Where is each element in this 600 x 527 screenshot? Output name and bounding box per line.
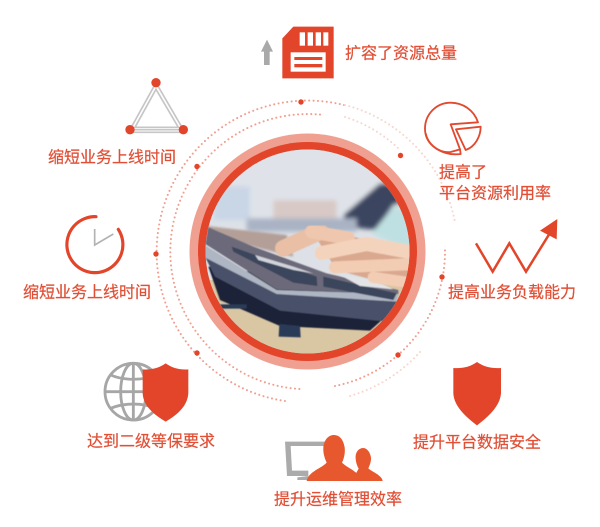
icon: shield <box>453 362 501 425</box>
orbit dots <box>153 99 445 358</box>
label: improve utilization: 平台资源利用率 <box>439 184 551 202</box>
photo: desk <box>210 280 406 354</box>
photo: hands <box>283 232 413 290</box>
dotted orbit rings <box>157 101 455 401</box>
label: improve utilization: 提高了 <box>439 164 487 182</box>
label: improve data security: 提升平台数据安全 <box>413 434 541 452</box>
icon: pie chart <box>425 103 481 154</box>
label: expand resources: 扩容了资源总量 <box>345 44 457 62</box>
icon: globe and shield <box>105 363 188 422</box>
icon: monitor and people <box>285 435 383 481</box>
central photo circle <box>190 134 426 370</box>
icon: rising trend arrow <box>476 219 557 272</box>
label: meet level two protection: 达到二级等保要求 <box>87 432 215 450</box>
label: shorten launch time, upper: 缩短业务上线时间 <box>48 148 176 166</box>
icon: capacity arrow and floppy disk <box>261 27 334 78</box>
label: improve operations efficiency: 提升运维管理效率 <box>274 490 402 508</box>
icon: triangle network <box>125 78 188 134</box>
icon: clock <box>67 217 123 273</box>
photo: keyboard <box>205 227 398 337</box>
label: improve utilization <box>439 164 551 202</box>
photo: blurred background <box>210 150 410 246</box>
label: shorten launch time, lower: 缩短业务上线时间 <box>23 284 151 302</box>
label: improve load capacity: 提高业务负载能力 <box>448 284 576 302</box>
